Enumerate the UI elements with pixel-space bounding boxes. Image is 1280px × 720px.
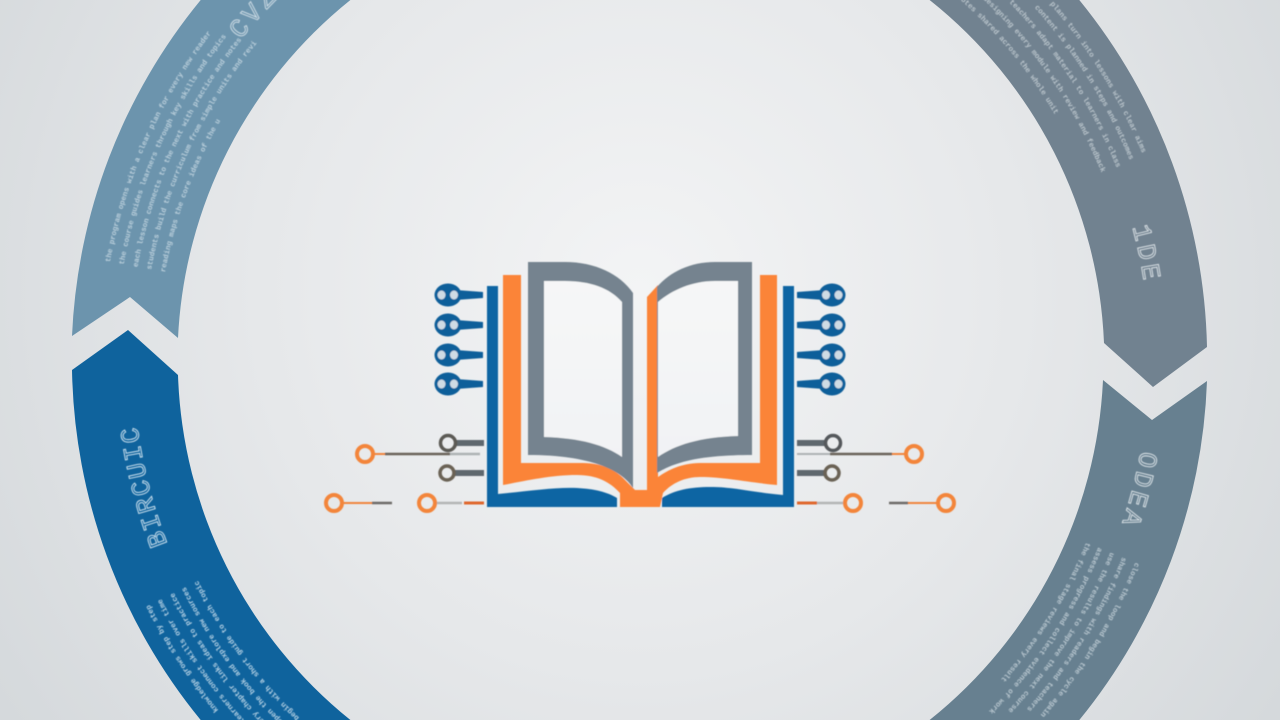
segment body text: content is planned in steps and outcomes [1035, 6, 1134, 160]
segment body text: knowledge grows step by step [146, 604, 218, 714]
book: left page [528, 262, 633, 488]
book: right page [657, 262, 752, 473]
segment body text: use the results to improve the next course [1008, 552, 1114, 713]
book: right blue cover [662, 286, 794, 507]
book: orange inner cover and spine [503, 275, 777, 507]
circuit connectors, left [326, 436, 484, 511]
segment shape: slate arc with notch [930, 380, 1207, 720]
panel: bottom-left ring segment [72, 330, 350, 720]
segment body text: reading maps the core ideas of the u [161, 118, 220, 272]
segment body text: close the loop and begin the cycle again [1040, 562, 1139, 718]
segment shape: grey arc with arrow tip [930, 0, 1207, 387]
segment body text: assess progress and collect evidence of work [988, 547, 1102, 714]
circuit connectors, right [797, 436, 954, 511]
panel: bottom-right ring segment [930, 380, 1207, 720]
segment body text: each lesson connects to the next with practice and notes [134, 38, 242, 268]
segment body text: share findings with readers and teachers [1027, 557, 1126, 712]
segment shape: steel blue arc with notch [72, 0, 350, 338]
blue connector pins, left [434, 284, 483, 396]
segment body text: students build the curriculum from simple units and revi [147, 40, 257, 270]
segment body text: the course guides learners through key skills and topics [118, 34, 226, 264]
segment heading: BIRCUIC [120, 427, 168, 549]
segment heading: 1DE [1132, 224, 1162, 280]
segment body text: teachers adapt material to learners in class [1010, 0, 1120, 168]
segment body text: the program opens with a clear plan for every new reader [105, 31, 210, 262]
blue connector pins, right [797, 284, 846, 396]
book: left grey page frame [528, 262, 633, 488]
book: left blue cover [487, 286, 617, 507]
segment body text [961, 0, 1146, 172]
segment body text: begin with a short guide to each topic [194, 580, 300, 720]
segment body text [146, 580, 300, 720]
segment shape: deep blue arc with arrow tip [72, 330, 350, 720]
icon: open book with circuit connectors [326, 262, 954, 511]
segment body text: designing every module with review and feedback [984, 0, 1106, 172]
segment body text: plans turn into lessons with clear aims [1049, 2, 1146, 153]
segment body text: the final stage reviews every result [1001, 543, 1090, 682]
panel: top-right ring segment [930, 0, 1207, 387]
segment heading: ODEA [1121, 452, 1158, 524]
panel: top-left ring segment [72, 0, 350, 338]
book: right grey page frame [657, 262, 752, 473]
